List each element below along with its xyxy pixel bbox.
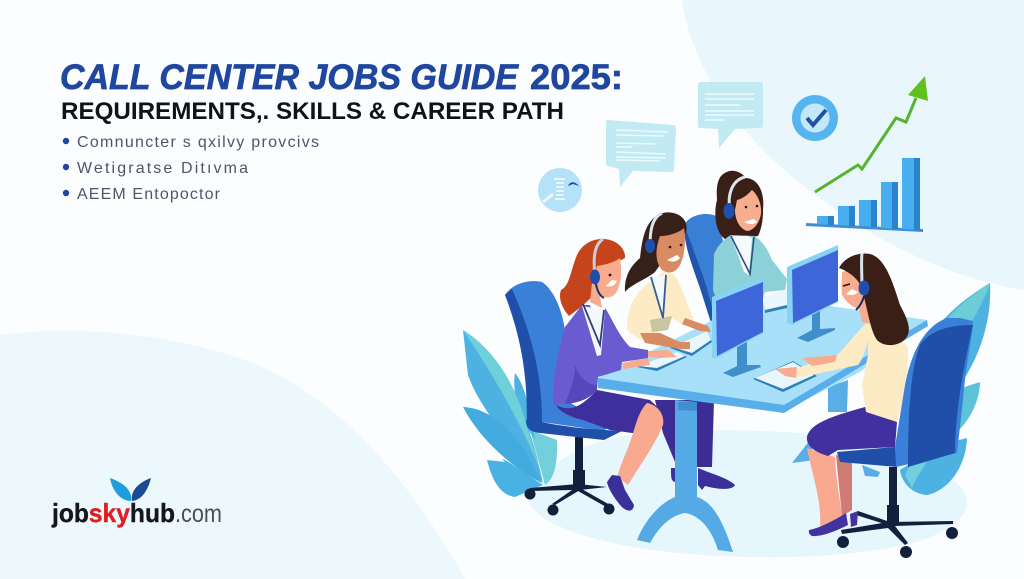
screen	[716, 282, 763, 356]
floor ellipse	[528, 430, 967, 557]
logo wordmark: .com	[175, 500, 222, 528]
bars	[817, 158, 920, 230]
torso	[862, 318, 908, 422]
person 4 far leg	[836, 455, 852, 516]
arms	[640, 333, 690, 349]
speech bubble: left	[606, 120, 676, 187]
face	[656, 228, 685, 272]
person 3: back agent	[713, 171, 787, 310]
table rear leg	[792, 380, 880, 477]
hair	[715, 171, 763, 240]
logo	[51, 478, 222, 528]
hair	[560, 239, 625, 316]
stand	[797, 308, 835, 342]
post and base	[524, 437, 614, 516]
hands	[775, 355, 837, 378]
person 1 skirt	[556, 390, 663, 434]
title: CALL CENTER JOBS GUIDE	[60, 58, 520, 97]
person 3 chair back	[684, 214, 735, 330]
person 1 shoes	[607, 475, 634, 511]
seat back	[505, 281, 610, 431]
logo leaves	[110, 478, 151, 501]
bezel	[712, 277, 763, 358]
lanyard	[651, 275, 666, 318]
title: 2025:	[530, 58, 623, 97]
face	[842, 265, 866, 308]
back frame	[895, 318, 973, 467]
blouse	[627, 272, 694, 340]
headset	[860, 253, 864, 288]
table top	[598, 296, 928, 413]
arm	[795, 322, 869, 378]
back panel	[908, 325, 973, 467]
bar chart	[806, 158, 923, 232]
skirt	[807, 407, 897, 456]
bullet 3: AEEM Entopoctor	[77, 186, 221, 203]
growth arrow	[815, 76, 928, 192]
hair	[839, 254, 909, 345]
person 1 chair	[505, 281, 622, 516]
icon: check badge	[792, 95, 838, 141]
person 1: left agent	[553, 239, 677, 405]
screen	[792, 250, 838, 323]
background blob: bottom left	[0, 331, 465, 579]
person 2 trousers	[655, 400, 714, 467]
face	[735, 190, 761, 231]
face	[590, 258, 621, 308]
hands	[622, 350, 677, 369]
person 4 chair	[837, 318, 973, 467]
subtitle: REQUIREMENTS,. SKILLS & CAREER PATH	[61, 98, 564, 125]
jacket	[553, 305, 648, 405]
keyboard: person 1	[637, 352, 687, 371]
headset	[650, 213, 662, 246]
stand	[723, 342, 761, 377]
keyboard: person 2	[670, 331, 712, 356]
bullet 1: Comnuncter s qxilvy provcivs	[77, 134, 319, 151]
person 2: middle agent	[625, 212, 711, 349]
monitor: rear	[787, 245, 838, 342]
keyboard: person 3	[762, 289, 787, 313]
icon: small circle document	[538, 168, 582, 212]
jacket	[713, 235, 787, 310]
headset	[594, 239, 603, 276]
person 4: right agent	[775, 253, 909, 536]
table centre leg	[637, 400, 733, 552]
chart baseline	[806, 223, 923, 232]
near leg	[807, 448, 842, 528]
shirt and lanyard	[582, 306, 605, 356]
plant: right	[900, 283, 990, 495]
seat	[837, 447, 897, 467]
bullet 2: Wetigratse Ditıvma	[77, 160, 248, 177]
shirt and lanyard	[731, 236, 752, 275]
monitor: front	[712, 277, 763, 377]
person 1 leg	[617, 403, 663, 485]
hair	[625, 212, 687, 292]
logo wordmark: jobskyhub	[51, 498, 175, 528]
shoes	[809, 511, 858, 536]
bullet list	[63, 134, 319, 203]
person 4 chair post and base	[837, 467, 958, 558]
keyboard: person 4	[753, 361, 817, 392]
speech bubble: right	[698, 82, 763, 148]
seat	[526, 420, 622, 440]
plant: left	[463, 330, 557, 497]
headset	[729, 177, 745, 210]
background blob: top right	[682, 0, 1024, 290]
person 2 shoes	[671, 468, 735, 490]
bezel	[787, 245, 838, 325]
neck	[857, 296, 870, 324]
